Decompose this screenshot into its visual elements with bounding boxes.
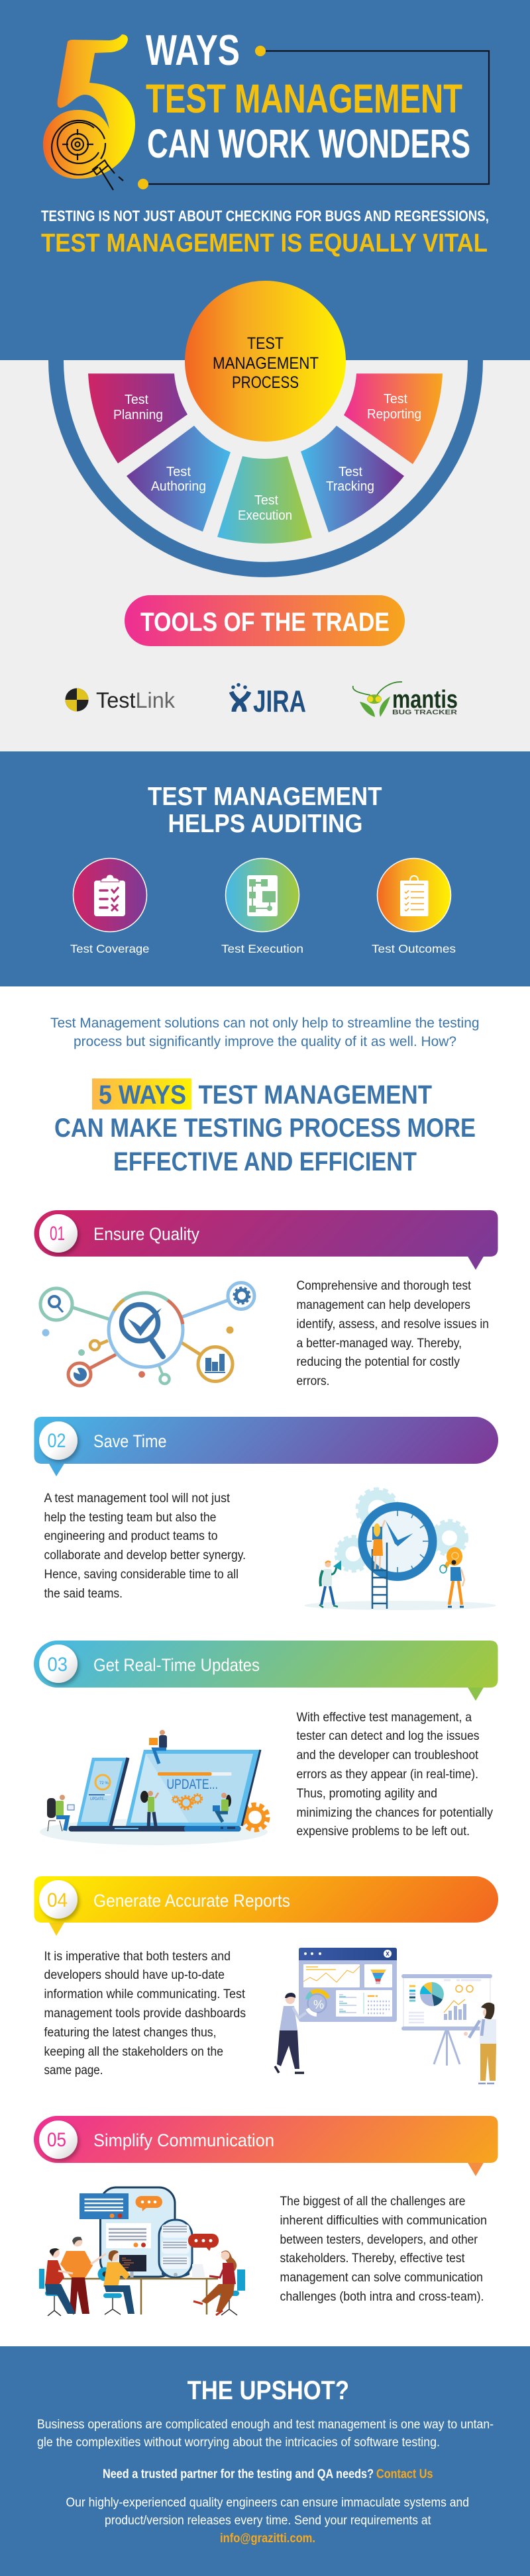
orange bubble: [135, 2196, 162, 2211]
gear: [242, 1805, 268, 1830]
text: accurate reports: [44, 1950, 246, 2077]
title text: WAYS: [146, 26, 240, 74]
banner 05: simplify communication: [34, 2116, 498, 2176]
text: real-time updates: Thus, promoting agility and: [297, 1787, 437, 1801]
logo: Mantis Bug Tracker: BUG TRACKER: [392, 708, 458, 716]
main heading: 5 ways: TEST MANAGEMENT: [199, 1080, 432, 1110]
text: save time: A test management tool will not just: [44, 1492, 231, 1505]
text: ensure quality: a better-managed way. Thereby,: [297, 1337, 462, 1351]
standing woman: [140, 1791, 158, 1831]
text: save time: Hence, saving considerable time to all: [44, 1568, 238, 1582]
illustration: clock and team: [304, 1489, 496, 1610]
laptop screen: [126, 1750, 260, 1826]
ladder: [372, 1543, 387, 1609]
illustration: dashboards: [0, 1948, 496, 2083]
outer arc: [48, 360, 483, 577]
intro text: process but significantly improve the quality of it as well. How?: [74, 1034, 456, 1049]
text: real-time updates: [297, 1711, 493, 1838]
hub circle: test management process: MANAGEMENT: [213, 354, 319, 373]
phone: [77, 1758, 128, 1826]
person on ladder: [372, 1520, 385, 1569]
heading: test management helps auditing: [148, 783, 382, 838]
logo: JIRA: JIRA: [253, 684, 306, 718]
segment: test tracking: Test: [339, 465, 362, 479]
icon: flowchart page: [247, 875, 278, 916]
banner 02: save time: [34, 1417, 498, 1476]
panel: test management process diagram: [48, 281, 483, 577]
banner 05: simplify communication: 05: [47, 2129, 66, 2151]
main heading: 5 ways: [54, 1078, 476, 1176]
segment: test tracking: [301, 426, 404, 532]
text: save time: collaborate and develop better synergy.: [44, 1549, 246, 1562]
tools of the trade pill: TOOLS OF THE TRADE: [140, 608, 390, 637]
closing paragraph: info@grazitti.com.: [220, 2532, 315, 2546]
title block: [43, 26, 489, 190]
segment: test execution: [217, 456, 312, 544]
logo: Mantis Bug Tracker: [353, 682, 458, 717]
banner 02: save time: 02: [48, 1430, 66, 1452]
segment: test reporting: [344, 373, 443, 464]
illustration: team communication: [39, 2187, 245, 2316]
segment: test execution: Execution: [238, 508, 292, 523]
text: simplify communication: between testers, developers, and other: [280, 2233, 478, 2247]
illustration: quality network: [40, 1283, 254, 1386]
segment: test planning: Planning: [113, 408, 163, 422]
text: accurate reports: developers should have up-to-date: [44, 1968, 225, 1982]
standing person orange: [60, 2236, 106, 2314]
text: ensure quality: Comprehensive and thorough test: [297, 1279, 472, 1293]
highlight box: [92, 1078, 191, 1110]
hub circle: test management process: TEST: [247, 334, 284, 353]
text: real-time updates: and the developer can troubleshoot: [297, 1748, 479, 1762]
text: simplify communication: stakeholders. Thereby, effective test: [280, 2252, 465, 2266]
text: accurate reports: keeping all the stakeholders on the: [44, 2045, 223, 2059]
segment: test authoring: Authoring: [151, 479, 206, 494]
banner 01: ensure quality: [34, 1210, 498, 1270]
man left: [275, 1993, 306, 2073]
phone: 72 %: [99, 1782, 109, 1786]
table: [63, 2279, 218, 2314]
text: ensure quality: management can help developers: [297, 1298, 470, 1312]
banner 01: ensure quality: Ensure Quality: [93, 1224, 199, 1244]
laptops: [73, 2259, 205, 2278]
text: real-time updates: minimizing the chances for potentially: [297, 1806, 493, 1820]
upshot paragraph: gle the complexities without worrying about the intricacies of software testing.: [37, 2436, 440, 2450]
man right: [464, 2003, 496, 2083]
text: save time: the said teams.: [44, 1587, 123, 1601]
banner 03: get real-time updates: Get Real-Time Updates: [93, 1655, 260, 1675]
red bubble: [188, 2234, 219, 2251]
person with megaphone: [319, 1560, 341, 1607]
gears: [336, 1489, 466, 1571]
text: save time: help the testing team but also the: [44, 1511, 216, 1525]
dashboard window: %: [313, 1998, 324, 2011]
presentation board: [0, 1974, 492, 2066]
phone: [159, 2220, 192, 2278]
auditing item: test coverage: Test Coverage: [70, 942, 150, 955]
segment: test authoring: Test: [166, 465, 191, 479]
seated person red: [39, 2248, 76, 2316]
heading: the upshot: THE UPSHOT?: [187, 2376, 349, 2405]
segment: test authoring: [127, 426, 231, 532]
closing paragraph: product/version releases every time. Send your requirements at: [105, 2514, 431, 2528]
auditing item: test outcomes: [372, 858, 456, 955]
intro text: [50, 1016, 480, 1049]
closing paragraph: [66, 2496, 469, 2546]
phone: UPDATE...: [90, 1797, 107, 1801]
text: save time: engineering and product teams to: [44, 1529, 217, 1543]
icon: checklist page: [400, 876, 428, 916]
clock: [362, 1507, 433, 1577]
laptop screen: UPDATE...: [167, 1777, 218, 1792]
auditing item: test execution: [221, 858, 303, 955]
auditing item: test outcomes: Test Outcomes: [372, 942, 456, 955]
heading: test management helps auditing: TEST MANAGEMENT: [148, 783, 382, 811]
dashboard window: [299, 1948, 397, 2022]
call to action: Contact Us: [376, 2467, 433, 2481]
segment: test tracking: Tracking: [326, 479, 374, 494]
icon: checklist clipboard: [94, 875, 125, 916]
title text: [146, 26, 470, 166]
hub circle: test management process: PROCESS: [232, 373, 299, 392]
banner 04: generate accurate reports: [34, 1876, 498, 1936]
text: accurate reports: same page.: [44, 2064, 103, 2077]
segment: test execution: Test: [254, 493, 278, 508]
closing paragraph: Our highly-experienced quality engineers can ensure immaculate systems and: [66, 2496, 469, 2510]
logo: Mantis Bug Tracker: mantis: [392, 686, 458, 714]
icon: large numeral 5 with target: [43, 34, 135, 190]
text: save time: [44, 1492, 246, 1601]
text: real-time updates: tester can detect and log the issues: [297, 1729, 480, 1743]
text: simplify communication: The biggest of all the challenges are: [280, 2195, 465, 2209]
text: real-time updates: expensive problems to be left out.: [297, 1825, 470, 1838]
text: simplify communication: [280, 2195, 487, 2304]
text: ensure quality: identify, assess, and resolve issues in: [297, 1317, 489, 1331]
hero background: [0, 0, 530, 360]
banner 01: ensure quality: 01: [50, 1223, 65, 1245]
main heading: 5 ways: 5 WAYS: [99, 1080, 186, 1110]
auditing item: test coverage: [70, 858, 150, 955]
laptop base: [69, 1826, 241, 1831]
banner 04: generate accurate reports: 04: [47, 1889, 68, 1911]
tablet: [101, 2187, 175, 2277]
text: simplify communication: challenges (both intra and cross-team).: [280, 2290, 484, 2304]
title frame: [138, 46, 489, 189]
text: ensure quality: errors.: [297, 1374, 330, 1388]
logo: JIRA: [231, 683, 306, 718]
auditing item: test execution: Test Execution: [221, 942, 303, 955]
segment: test planning: [88, 373, 187, 463]
heading: test management helps auditing: HELPS AUDITING: [168, 810, 363, 838]
upshot paragraph: [37, 2418, 494, 2450]
text: simplify communication: management can solve communication: [280, 2271, 483, 2285]
main heading: 5 ways: CAN MAKE TESTING PROCESS MORE: [54, 1114, 476, 1143]
call to action: Need a trusted partner for the testing and QA needs?: [103, 2467, 374, 2481]
upshot paragraph: Business operations are complicated enough and test management is one way to untan-: [37, 2418, 494, 2432]
person sitting on screen: [149, 1730, 167, 1764]
segment: test reporting: Test: [384, 392, 407, 406]
text: accurate reports: featuring the latest changes thus,: [44, 2026, 216, 2040]
text: accurate reports: It is imperative that both testers and: [44, 1950, 231, 1964]
banner 02: save time: Save Time: [93, 1431, 167, 1451]
text: accurate reports: information while communicating. Test: [44, 1987, 246, 2001]
text: real-time updates: With effective test management, a: [297, 1711, 472, 1725]
main heading: 5 ways: EFFECTIVE AND EFFICIENT: [113, 1147, 417, 1176]
text: simplify communication: inherent difficulties with communication: [280, 2214, 487, 2228]
text: real-time updates: errors as they appear (in real-time).: [297, 1768, 478, 1782]
seated woman: [193, 2250, 245, 2315]
banner 04: generate accurate reports: Generate Accurate Reports: [93, 1891, 290, 1911]
tools of the trade pill: [125, 595, 405, 646]
illustration: laptop update: [40, 1730, 268, 1845]
footer background: [0, 2346, 530, 2576]
banner 03: get real-time updates: 03: [48, 1654, 68, 1676]
text: ensure quality: [297, 1279, 489, 1388]
segment: test planning: Test: [125, 393, 148, 407]
intro text: Test Management solutions can not only help to streamline the testing: [50, 1016, 480, 1031]
banner 03: get real-time updates: [34, 1641, 498, 1701]
white card: [106, 2223, 151, 2248]
banner 05: simplify communication: Simplify Communication: [93, 2130, 274, 2150]
auditing background: [0, 751, 530, 986]
seated person yellow: [98, 2250, 134, 2314]
segment: test reporting: Reporting: [367, 407, 421, 422]
monitor: [119, 2255, 146, 2277]
subtitle: [41, 207, 489, 258]
light process background: [0, 360, 530, 751]
subtitle: TEST MANAGEMENT IS EQUALLY VITAL: [41, 229, 488, 258]
sitting woman: [213, 1793, 231, 1822]
text: ensure quality: reducing the potential for costly: [297, 1355, 460, 1369]
seated person left: [47, 1795, 74, 1831]
hub circle: test management process: [185, 281, 346, 442]
blue note: [80, 2193, 129, 2219]
logo: TestLink: TestLink: [96, 688, 175, 712]
text: accurate reports: management tools provide dashboards: [44, 2007, 246, 2021]
person with lightbulb: [440, 1547, 464, 1607]
